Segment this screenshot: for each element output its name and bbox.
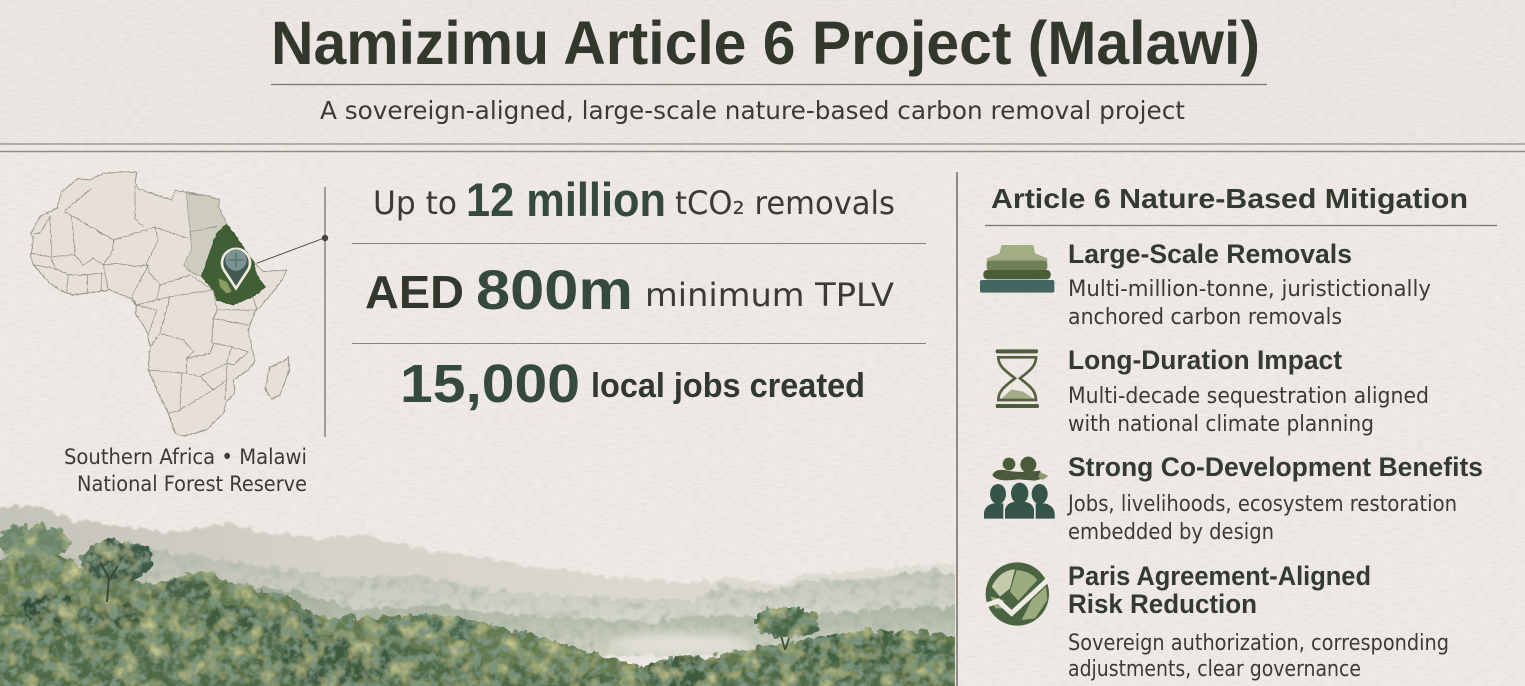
item: paris agreement risk reduction: adjustments, clear governance <box>1068 657 1361 682</box>
egypt and sudan shading <box>183 193 227 277</box>
item: paris agreement risk reduction: Paris Agreement-Aligned <box>1068 561 1371 591</box>
map divider with connector dot <box>322 187 328 437</box>
highlighted project region <box>202 224 265 305</box>
subtitle: A sovereign-aligned, large-scale nature-based carbon removal project <box>320 96 1185 125</box>
icon: hourglass <box>996 349 1039 408</box>
lower ridge <box>180 575 965 655</box>
stat: value: 800m <box>476 258 633 321</box>
map caption: Southern Africa • Malawi <box>64 445 307 469</box>
right tree <box>754 607 820 650</box>
item: large-scale removals: anchored carbon removals <box>1068 305 1342 330</box>
item: paris agreement risk reduction <box>1068 561 1449 682</box>
item: co-development benefits: Strong Co-Development Benefits <box>1068 452 1483 482</box>
stat: removals <box>373 173 895 226</box>
far ridge <box>0 503 955 604</box>
icon: layered soil stack <box>980 245 1054 293</box>
landscape illustration: misty forest <box>0 505 965 686</box>
icon: globe with check mark <box>986 562 1049 626</box>
title: Namizimu Article 6 Project (Malawi) <box>271 9 1260 77</box>
near hillside <box>0 552 965 686</box>
left tree group <box>0 525 940 686</box>
valley mist <box>610 634 750 656</box>
map caption: National Forest Reserve <box>77 472 307 496</box>
stat: value: AED <box>365 266 464 318</box>
stat: value: minimum TPLV <box>645 276 894 314</box>
foreground canopy <box>0 610 965 686</box>
item: paris agreement risk reduction: Sovereign authorization, corresponding <box>1068 631 1449 656</box>
leader line <box>257 238 325 263</box>
stat: removals: 12 million <box>466 173 666 226</box>
item: co-development benefits: Jobs, livelihoods, ecosystem restoration <box>1066 492 1457 517</box>
item: paris agreement risk reduction: Risk Reduction <box>1068 589 1257 619</box>
stat: value <box>365 258 894 321</box>
item: long-duration impact: Long-Duration Impact <box>1068 345 1342 375</box>
icon: community people <box>984 457 1055 519</box>
tree trunk left <box>100 562 118 602</box>
country borders <box>32 187 257 413</box>
panel: Article 6 Nature-Based Mitigation <box>980 183 1497 682</box>
item: co-development benefits <box>1066 452 1483 545</box>
map of Africa with project location <box>31 172 325 436</box>
item: large-scale removals: Large-Scale Removals <box>1068 239 1352 269</box>
item: long-duration impact: with national climate planning <box>1068 412 1374 437</box>
item: long-duration impact <box>1068 345 1429 437</box>
item: co-development benefits: embedded by design <box>1068 520 1274 545</box>
madagascar <box>265 357 289 399</box>
stat: jobs: local jobs created <box>591 367 865 405</box>
map caption <box>64 445 307 496</box>
item: large-scale removals: Multi-million-tonne, juristictionally <box>1068 277 1431 302</box>
stat: removals: Up to <box>373 184 457 222</box>
location pin <box>222 249 250 288</box>
stat: removals: tCO₂ removals <box>675 184 895 222</box>
item: large-scale removals <box>1068 239 1431 330</box>
panel heading: Article 6 Nature-Based Mitigation <box>991 183 1468 214</box>
stat: jobs: 15,000 <box>400 354 580 414</box>
stat: jobs <box>400 354 865 414</box>
item: long-duration impact: Multi-decade sequestration aligned <box>1068 384 1429 409</box>
middle ridge <box>0 548 955 625</box>
continent <box>31 172 287 436</box>
